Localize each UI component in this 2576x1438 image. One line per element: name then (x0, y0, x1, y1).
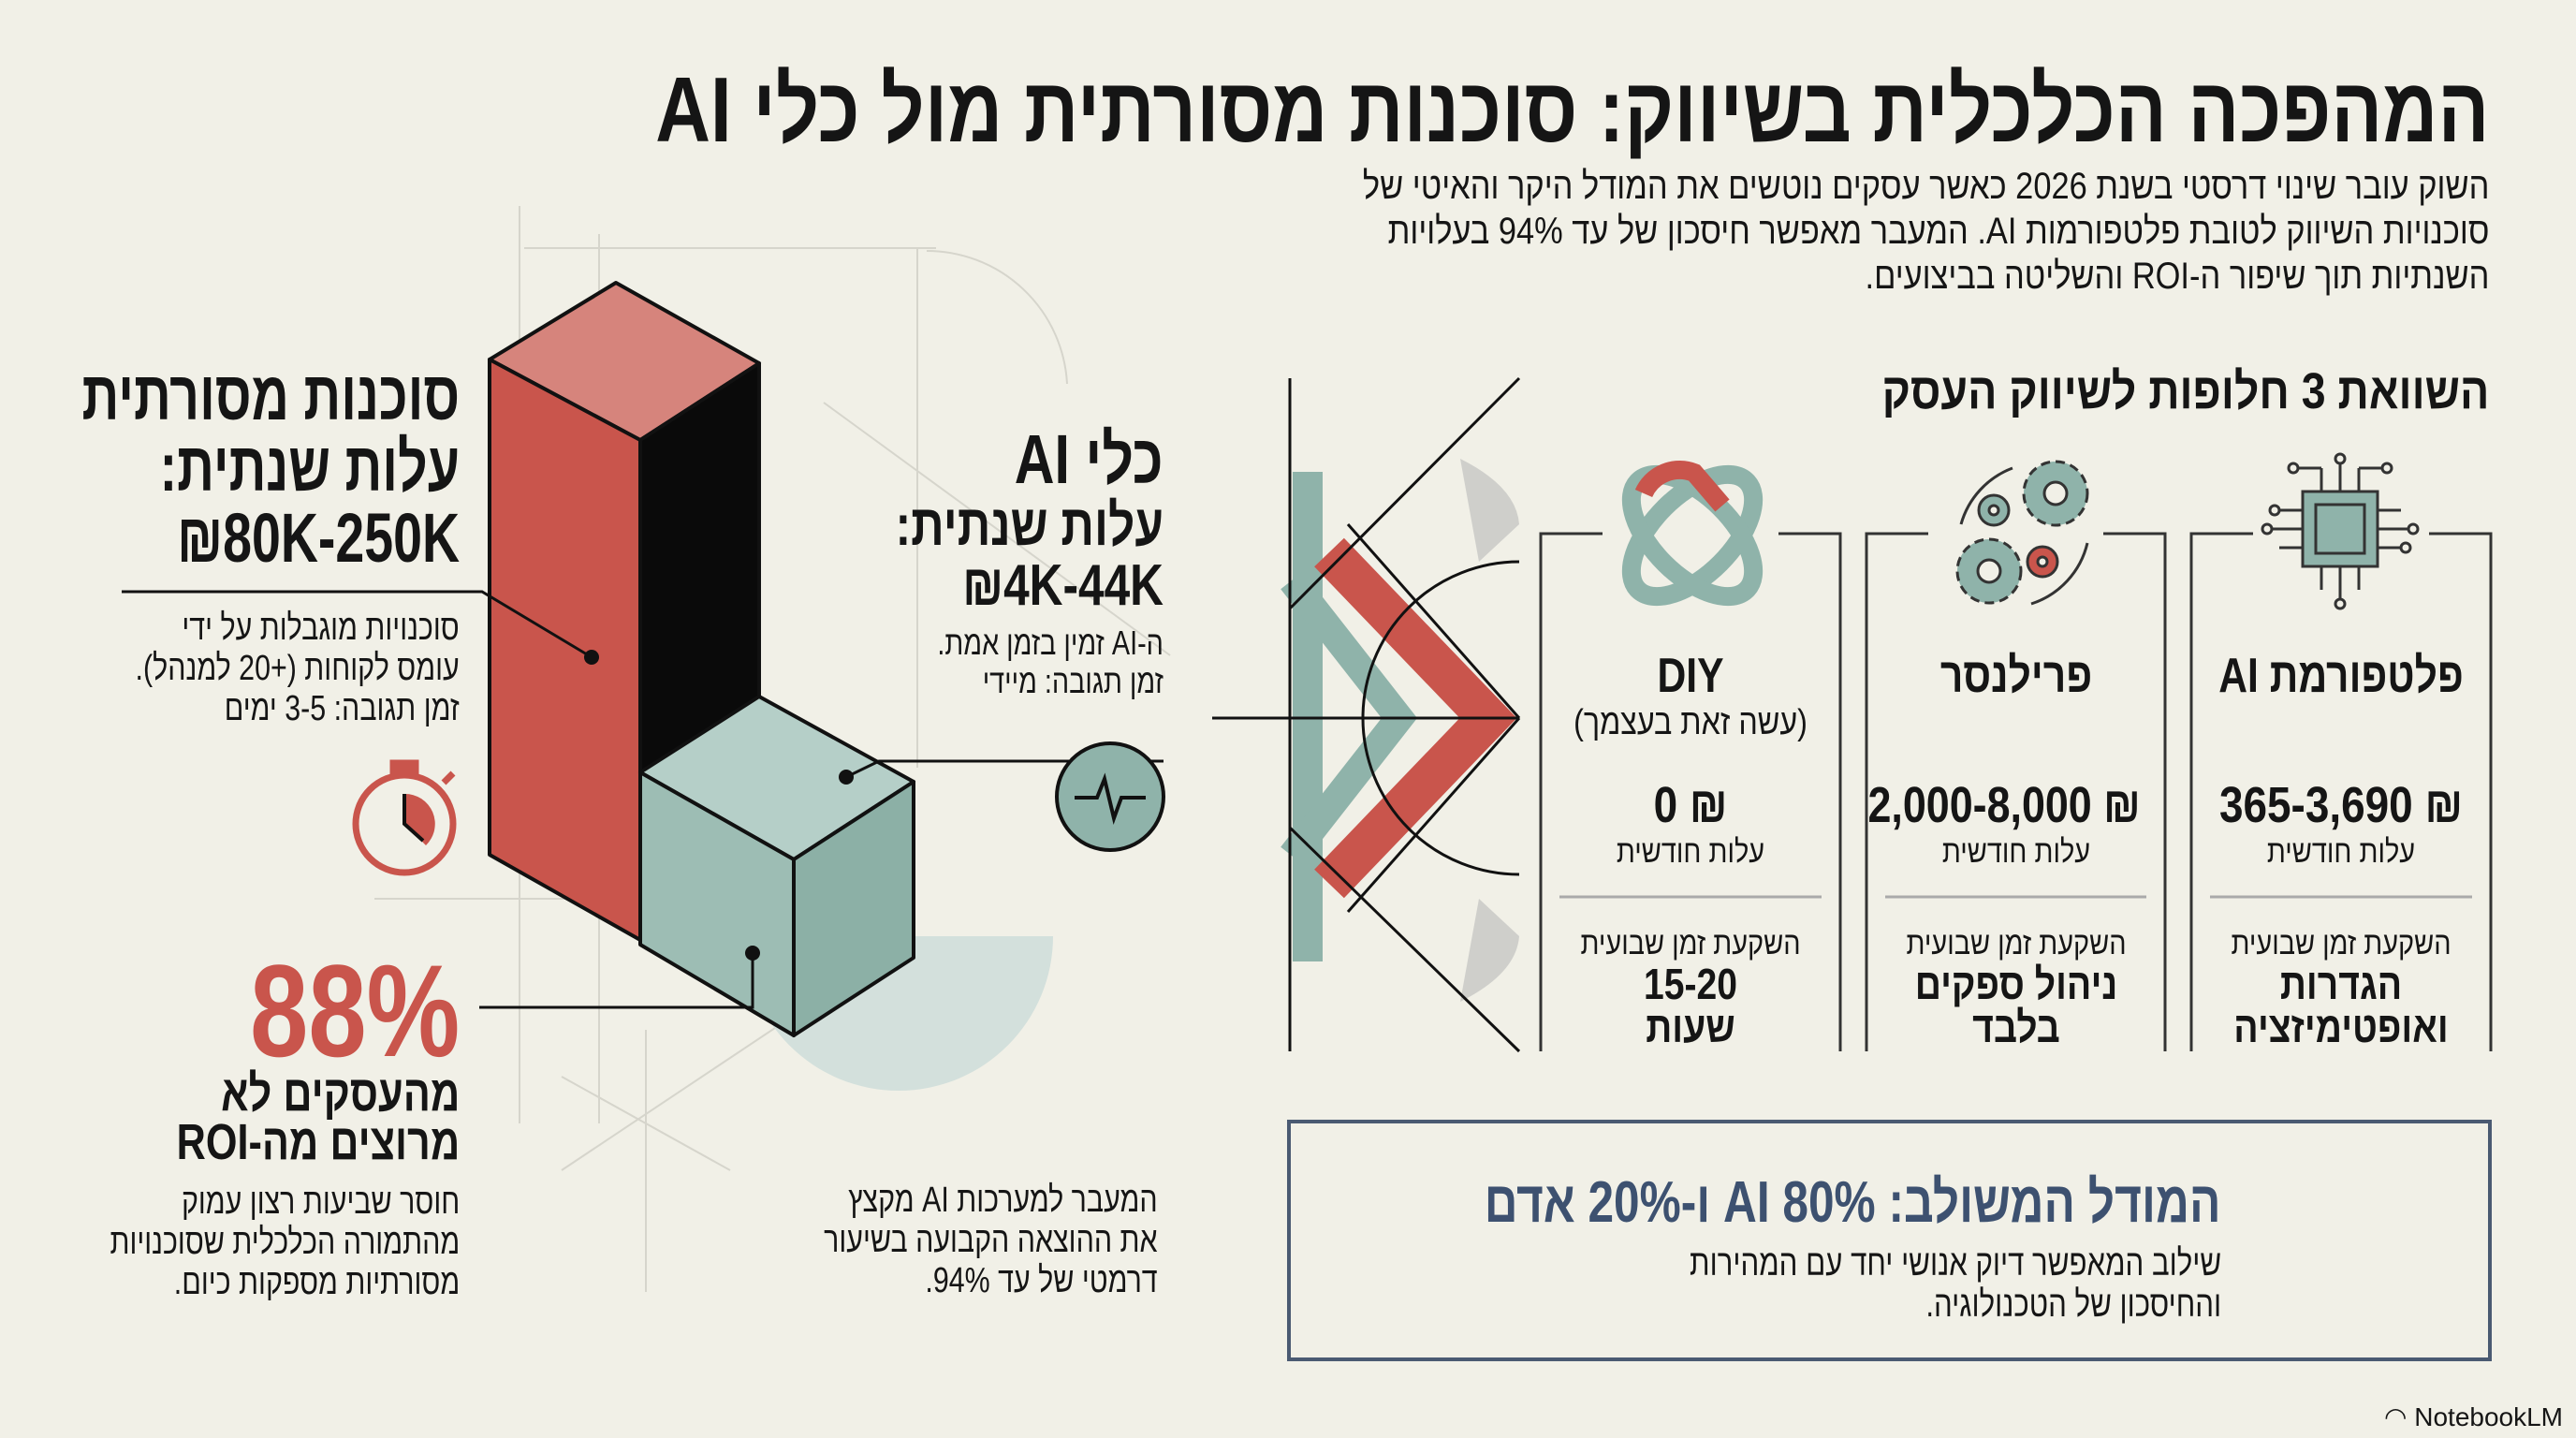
text: dissatisfaction (110, 1182, 460, 1302)
text: AI notes: ה-AI זמין בזמן אמת. (937, 624, 1164, 662)
text: agency notes (136, 609, 460, 728)
subtitle: השוק עובר שינוי דרסטי בשנת 2026 כאשר עסקים נוטשים את המודל היקר והאיטי של (1363, 166, 2489, 207)
callout text: שילוב המאפשר דיוק אנושי יחד עם המהירות (1690, 1243, 2221, 1284)
heading: AI tools: כלי AI (1015, 420, 1164, 498)
column: DIY: שעות (1646, 1003, 1735, 1051)
column: AI platform: ואופטימיזציה (2233, 1003, 2449, 1051)
leader lines (122, 592, 1164, 1007)
callout text (1690, 1243, 2221, 1325)
column: DIY: ₪ 0 (1654, 777, 1727, 833)
column: AI platform: הגדרות (2280, 960, 2402, 1008)
column: freelancer: השקעת זמן שבועית (1906, 926, 2127, 961)
column: DIY: (עשה זאת בעצמך) (1573, 703, 1808, 742)
text: agency notes: סוכנויות מוגבלות על ידי (183, 609, 460, 648)
left heading: traditional agency: ₪80K-250K (177, 499, 460, 577)
icon: pulse (1057, 743, 1164, 850)
text: agency notes: עומס לקוחות (+20 למנהל). (136, 649, 460, 688)
stat label (176, 1065, 460, 1170)
callout text: והחיסכון של הטכנולוגיה. (1925, 1284, 2221, 1325)
logo: NotebookLM: ◠ NotebookLM (2384, 1402, 2563, 1431)
title: המהפכה הכלכלית בשיווק: סוכנות מסורתית מול כלי AI (655, 58, 2489, 161)
text: AI savings: את ההוצאה הקבועה בשיעור (824, 1221, 1158, 1260)
text: AI savings (824, 1181, 1158, 1300)
text: AI savings: המעבר למערכות AI מקצץ (849, 1181, 1158, 1220)
column: DIY: 15-20 (1644, 960, 1737, 1008)
icon: chip (AI platform) (2262, 454, 2418, 609)
column: AI platform: עלות חודשית (2267, 834, 2415, 870)
column: AI platform (2218, 649, 2464, 1051)
bottom box frame (1289, 1122, 2490, 1359)
column: freelancer: פרילנסר (1940, 649, 2092, 703)
column: AI platform: פלטפורמת AI (2218, 649, 2464, 703)
section heading: השוואת 3 חלופות לשיווק העסק (1881, 363, 2489, 419)
text: AI annual cost: ₪4K-44K (962, 553, 1164, 618)
column: freelancer: עלות חודשית (1942, 834, 2090, 870)
column: freelancer: ניהול ספקים (1915, 960, 2117, 1008)
subtitle (1363, 166, 2489, 297)
text: AI annual cost (896, 493, 1164, 618)
text: AI annual cost: עלות שנתית: (896, 493, 1164, 558)
column: AI platform: השקעת זמן שבועית (2231, 926, 2452, 961)
column: freelancer (1867, 649, 2141, 1051)
stat label: מהעסקים לא (221, 1065, 460, 1122)
column: DIY (1573, 649, 1808, 1051)
column: DIY: השקעת זמן שבועית (1580, 926, 1801, 961)
text: dissatisfaction: מהתמורה הכלכלית שסוכנויות (110, 1223, 460, 1262)
icon: stopwatch (356, 763, 453, 873)
stat 88%: 88% (250, 937, 460, 1084)
teal shadow (744, 782, 1053, 1091)
column: DIY: עלות חודשית (1617, 834, 1764, 870)
bar: AI tools (teal) (640, 697, 914, 1035)
callout: hybrid model: המודל המשולב: AI 80% ו-20% אדם (1485, 1170, 2221, 1235)
icon: knot (DIY) (1610, 453, 1775, 618)
text: AI savings: דרמטי של עד 94%. (926, 1261, 1158, 1300)
chevron decoration (1212, 378, 1519, 1051)
subtitle: השנתיות תוך שיפור ה-ROI והשליטה בביצועים. (1865, 256, 2489, 297)
text: AI notes: זמן תגובה: מיידי (983, 662, 1164, 700)
comparison column frames (1541, 534, 2491, 1051)
stat label: מרוצים מה-ROI (176, 1114, 460, 1170)
text: dissatisfaction: מסורתיות מספקות כיום. (174, 1263, 460, 1302)
bar: traditional agency (red) (490, 283, 759, 940)
subtitle: סוכנויות השיווק לטובת פלטפורמות AI. המעבר מאפשר חיסכון של עד 94% בעלויות (1387, 211, 2489, 252)
text: dissatisfaction: חוסר שביעות רצון עמוק (182, 1182, 460, 1222)
left heading: traditional agency: עלות שנתית: (160, 428, 460, 506)
icon: gears (freelancer) (1957, 462, 2087, 604)
column: DIY: DIY (1657, 649, 1724, 703)
left heading: traditional agency (81, 357, 460, 577)
column: AI platform: ₪ 365-3,690 (2219, 777, 2463, 833)
column: freelancer: ₪ 2,000-8,000 (1867, 777, 2141, 833)
column: freelancer: בלבד (1972, 1003, 2060, 1051)
text: agency notes: זמן תגובה: 3-5 ימים (225, 689, 460, 728)
left heading: traditional agency: סוכנות מסורתית (81, 357, 460, 434)
text: AI notes (937, 624, 1164, 700)
